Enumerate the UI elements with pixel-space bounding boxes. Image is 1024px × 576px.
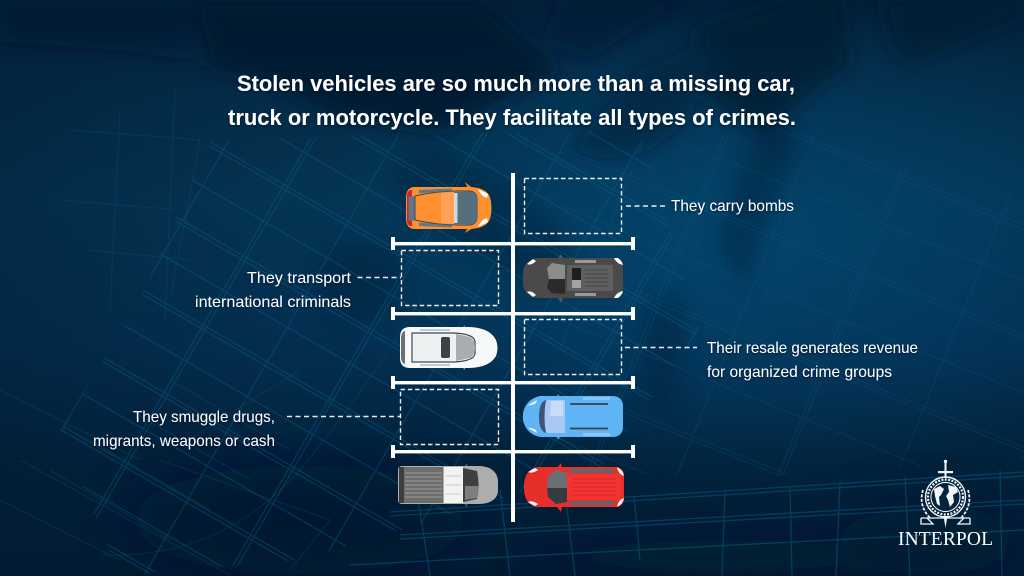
emblem: globe bbox=[932, 483, 960, 511]
label: they transport international criminals bbox=[195, 270, 352, 311]
wordmark: INTERPOL bbox=[898, 529, 993, 550]
label: smuggling: They smuggle drugs, bbox=[133, 409, 275, 426]
title bbox=[228, 71, 796, 130]
emblem: sword bbox=[938, 460, 953, 528]
label: smuggling bbox=[93, 409, 275, 450]
logo: INTERPOL emblem bbox=[898, 460, 993, 550]
car: grey pickup truck bbox=[398, 463, 498, 507]
label: they transport international criminals: international criminals bbox=[195, 294, 351, 311]
label: they carry bombs: They carry bombs bbox=[671, 198, 794, 215]
emblem: laurels bbox=[922, 490, 969, 519]
empty parking bays bbox=[400, 178, 622, 444]
label: they transport international criminals: They transport bbox=[247, 270, 352, 287]
title: truck or motorcycle. They facilitate all types of crimes. bbox=[228, 105, 796, 130]
parking lot lines bbox=[391, 173, 635, 522]
map street arcs: left bbox=[0, 90, 420, 575]
label: smuggling: migrants, weapons or cash bbox=[93, 433, 275, 450]
car: blue hatchback bbox=[523, 394, 623, 440]
car: white SUV bbox=[400, 325, 498, 370]
map street grid: right bbox=[560, 130, 1024, 480]
dark hand band across the centre bbox=[320, 110, 800, 420]
label: resale revenue bbox=[707, 340, 918, 381]
title: Stolen vehicles are so much more than a missing car, bbox=[237, 71, 795, 96]
map street grid: bottom bbox=[350, 470, 1024, 576]
car: red SUV bbox=[524, 463, 624, 512]
emblem: scales bbox=[921, 518, 970, 524]
label: resale revenue: for organized crime groups bbox=[707, 364, 892, 381]
car: dark SUV bbox=[523, 254, 623, 303]
label: resale revenue: Their resale generates revenue bbox=[707, 340, 918, 357]
dark lower gradient patch bbox=[130, 466, 1020, 576]
leader lines bbox=[287, 206, 697, 416]
map street grid: centre bbox=[60, 130, 700, 576]
car: orange hatchback bbox=[406, 182, 492, 233]
dark top shadow shapes bbox=[0, 0, 1024, 160]
emblem: ring bbox=[926, 477, 966, 517]
